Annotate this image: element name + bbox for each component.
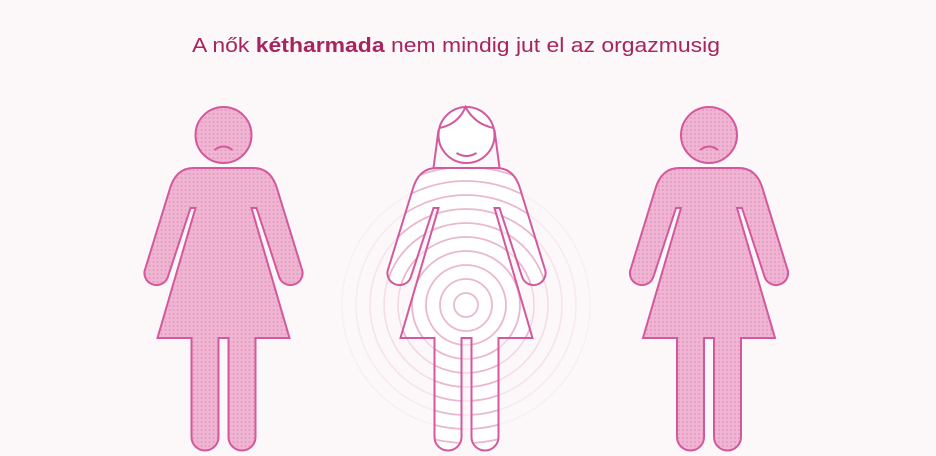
- figure: left sad woman: [144, 107, 303, 450]
- title: A nők kétharmada nem mindig jut el az orgazmusig: [192, 35, 720, 57]
- figure: right sad woman: [630, 107, 788, 450]
- ripples outside: [342, 181, 590, 429]
- figure: middle happy woman with ripples: [356, 104, 576, 452]
